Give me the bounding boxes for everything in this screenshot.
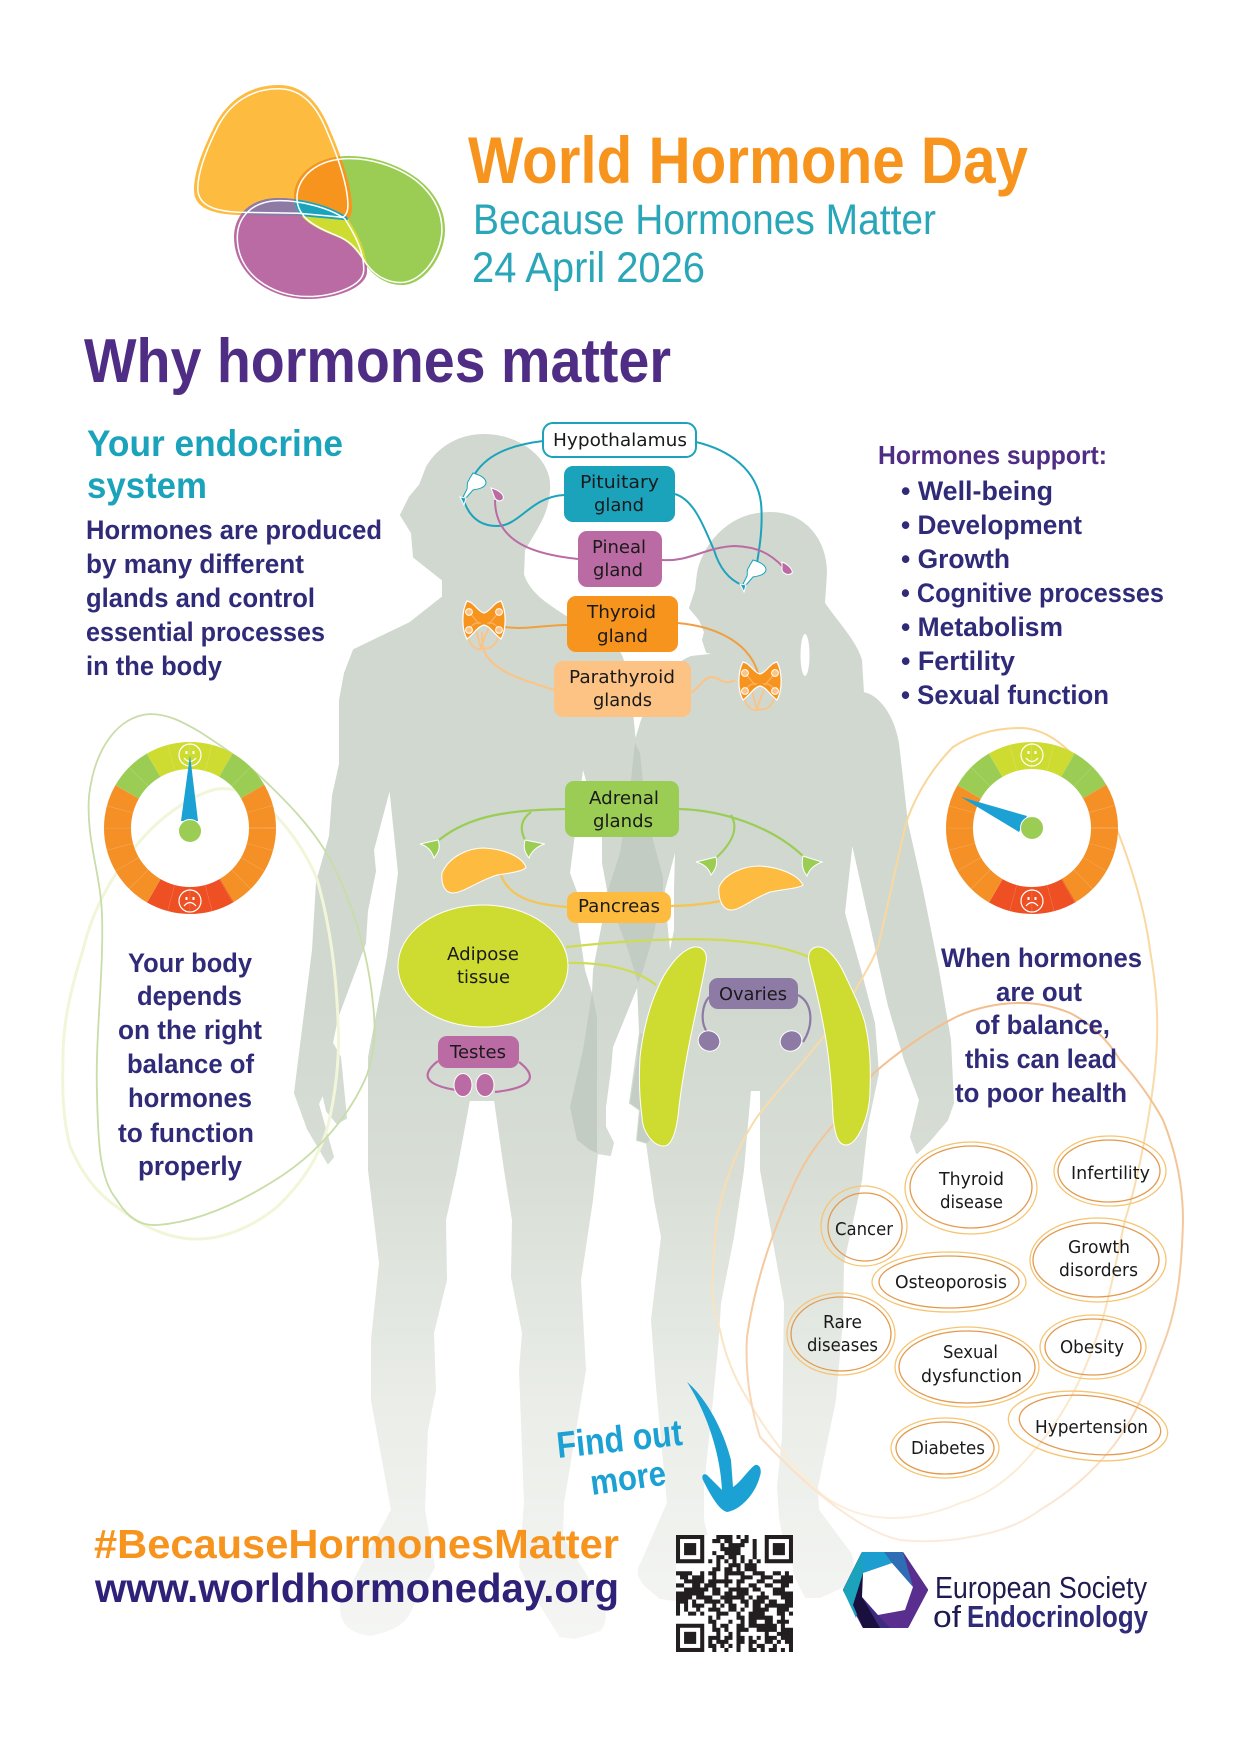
label: pituitary gland: [564, 466, 675, 522]
heading: Why hormones matter: Why hormones matter: [84, 327, 671, 396]
label: adrenal glands: Adrenal: [589, 788, 659, 809]
label: adipose tissue: [398, 905, 568, 1027]
description: by many different: [86, 549, 304, 579]
text: your body depends on the right balance: to function: [118, 1118, 254, 1148]
title: World Hormone Day: World Hormone Day: [468, 123, 1028, 197]
subheading: Your endocrine: [87, 423, 343, 464]
logo: European Society of Endocrinology: [843, 1552, 1149, 1634]
label: adrenal glands: glands: [593, 811, 653, 832]
label: adipose tissue: Adipose: [447, 944, 519, 965]
label: pineal gland: gland: [593, 560, 643, 581]
icon: testes: [454, 1074, 494, 1096]
icon: thyroid gland, male: [463, 601, 505, 649]
condition: diabetes: Diabetes: [911, 1438, 985, 1459]
decorative rings: left balance: [63, 714, 375, 1239]
label: hypothalamus: [543, 423, 696, 457]
condition: infertility: [1054, 1136, 1166, 1206]
icon: adipose tissue hips: [639, 947, 870, 1146]
icon: ovaries: [695, 1027, 805, 1055]
society name: European Society: [935, 1570, 1147, 1605]
connector lines: hypothalamus, pituitary, pineal: [463, 441, 783, 585]
condition: osteoporosis: Osteoporosis: [895, 1272, 1007, 1293]
condition: growth disorders: [1030, 1218, 1166, 1302]
subheading: [87, 423, 343, 506]
list items: • Well-being: [901, 476, 1053, 506]
list items: • Metabolism: [901, 612, 1063, 642]
label: adrenal glands: [565, 781, 679, 837]
condition: osteoporosis: [872, 1252, 1026, 1312]
hexagon centre: [862, 1563, 913, 1615]
needle hub: [1020, 816, 1044, 840]
gauge: balanced hormones: [91, 729, 289, 927]
list items: • Fertility: [901, 646, 1015, 676]
of Endocrinology: Endocrinology: [967, 1599, 1149, 1634]
gauge: hormones out of balance: [933, 729, 1131, 927]
condition: rare diseases: diseases: [807, 1335, 878, 1356]
condition: thyroid disease: [905, 1142, 1037, 1234]
list items: • Growth: [901, 544, 1010, 574]
icon: pancreas: [442, 848, 803, 910]
label: hypothalamus: Hypothalamus: [553, 430, 687, 451]
QR code: [676, 1535, 793, 1652]
hexagon mark: [843, 1552, 928, 1628]
label: pineal gland: Pineal: [592, 537, 646, 558]
text block: your endocrine system: [86, 423, 382, 681]
list items: • Sexual function: [901, 680, 1109, 710]
needle: [961, 797, 1027, 832]
description: Hormones are produced: [86, 515, 382, 545]
condition: cancer: Cancer: [835, 1219, 894, 1240]
label: thyroid gland: gland: [597, 626, 648, 647]
website: www.worldhormoneday.org: [94, 1565, 619, 1611]
condition: cancer: [821, 1186, 907, 1266]
description: [86, 515, 382, 681]
text: your body depends on the right balance: on the right: [118, 1015, 262, 1045]
condition: sexual dysfunction: Sexual: [943, 1342, 998, 1363]
hashtag: #BecauseHormonesMatter: [94, 1521, 619, 1567]
text: when hormones are out of balance: this can lead: [965, 1044, 1117, 1074]
panel: health conditions: [787, 1136, 1171, 1478]
condition: growth disorders: Growth: [1068, 1237, 1130, 1258]
arrow: pointing to QR code: [687, 1382, 761, 1512]
list items: • Development: [901, 510, 1082, 540]
text: when hormones are out of balance: When hormones: [941, 943, 1142, 973]
list items: • Cognitive processes: [901, 578, 1164, 608]
description: in the body: [86, 651, 222, 681]
text: when hormones are out of balance: [941, 943, 1142, 1108]
of Endocrinology: of: [933, 1599, 961, 1634]
condition: sexual dysfunction: dysfunction: [921, 1366, 1022, 1387]
text: your body depends on the right balance: hormones: [128, 1083, 252, 1113]
text: when hormones are out of balance: to poor health: [955, 1078, 1127, 1108]
subheading: system: [87, 465, 207, 506]
text: your body depends on the right balance: [118, 948, 262, 1181]
condition: rare diseases: Rare: [823, 1312, 862, 1333]
icon: pituitary gland, male: [460, 473, 486, 505]
text: when hormones are out of balance: of balance,: [975, 1010, 1110, 1040]
decorative rings: right imbalance: [712, 728, 1183, 1541]
list items: [901, 476, 1164, 710]
call to action: find out more: [555, 1412, 684, 1503]
label: parathyroid glands: [554, 661, 691, 717]
icon: pineal gland, female: [782, 562, 792, 574]
condition: obesity: Obesity: [1060, 1337, 1124, 1358]
list heading: Hormones support:: [878, 440, 1107, 470]
label: pituitary gland: gland: [594, 495, 644, 516]
needle hub: [178, 820, 202, 842]
label: thyroid gland: [567, 596, 678, 652]
condition: diabetes: [891, 1418, 999, 1478]
condition: rare diseases: [787, 1293, 895, 1375]
icon: pituitary gland, female: [740, 560, 766, 592]
label: pancreas: [567, 892, 671, 923]
condition: hypertension: Hypertension: [1035, 1417, 1148, 1438]
call to action: find out more: Find out: [555, 1412, 684, 1466]
call to action: find out more: more: [588, 1454, 668, 1503]
label: pancreas: Pancreas: [578, 896, 660, 917]
condition: thyroid disease: disease: [940, 1192, 1003, 1213]
label: parathyroid glands: glands: [593, 690, 652, 711]
label: testes: Testes: [449, 1042, 506, 1063]
icon: thyroid gland, female: [739, 662, 781, 710]
condition: hypertension: [1005, 1384, 1171, 1468]
label: ovaries: Ovaries: [719, 984, 787, 1005]
logo: World Hormone Day overlapping shapes: [194, 85, 445, 299]
label: testes: [438, 1036, 519, 1068]
text: your body depends on the right balance: Your body: [128, 948, 252, 978]
condition: thyroid disease: Thyroid: [938, 1169, 1004, 1190]
text: when hormones are out of balance: are out: [996, 977, 1082, 1007]
label: adipose tissue: tissue: [457, 967, 510, 988]
label: parathyroid glands: Parathyroid: [569, 667, 675, 688]
text: your body depends on the right balance: properly: [138, 1151, 242, 1181]
condition: sexual dysfunction: [895, 1327, 1039, 1407]
label: pineal gland: [578, 531, 662, 587]
label: ovaries: [709, 978, 798, 1009]
label: pituitary gland: Pituitary: [580, 472, 659, 493]
date: 24 April 2026: 24 April 2026: [472, 244, 705, 292]
connector lines: thyroid and parathyroid: [482, 623, 759, 693]
description: essential processes: [86, 617, 325, 647]
condition: obesity: [1040, 1315, 1146, 1379]
needle: [181, 755, 198, 821]
subtitle: Because Hormones Matter: Because Hormones Matter: [473, 196, 936, 244]
icon: adrenal glands: [420, 840, 822, 876]
text block: hormones support list: [878, 440, 1164, 710]
text: your body depends on the right balance: balance of: [127, 1049, 255, 1079]
connector lines: adrenal, pancreas, adipose, ovaries, testes: [428, 809, 810, 1092]
label: thyroid gland: Thyroid: [586, 602, 656, 623]
description: glands and control: [86, 583, 315, 613]
silhouettes: male and female figures: [295, 435, 953, 1638]
icon: pineal gland, male: [491, 488, 503, 501]
text: your body depends on the right balance: depends: [137, 981, 242, 1011]
condition: infertility: Infertility: [1071, 1163, 1150, 1184]
condition: growth disorders: disorders: [1059, 1260, 1138, 1281]
